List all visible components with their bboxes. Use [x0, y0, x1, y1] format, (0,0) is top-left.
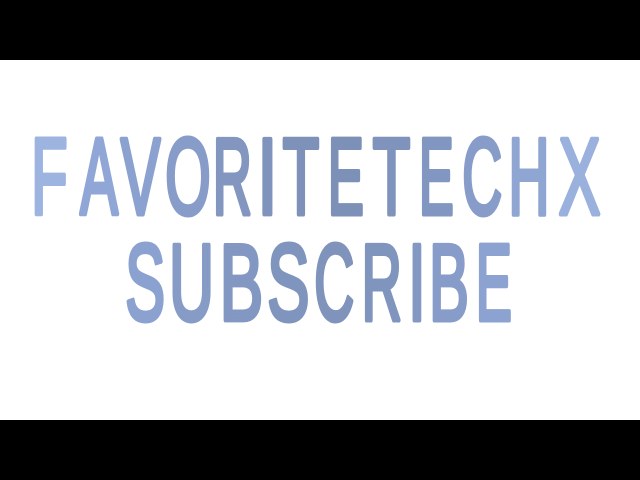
- heading: SUBSCRIBE: I: [408, 221, 426, 343]
- heading: SUBSCRIBE: [125, 221, 512, 344]
- heading: FAVORITETECHX: A: [80, 116, 118, 238]
- heading: SUBSCRIBE: B: [429, 222, 469, 344]
- heading: SUBSCRIBE: C: [314, 223, 354, 344]
- bottom black letterbox bar: [0, 420, 640, 480]
- heading: FAVORITETECHX: F: [31, 115, 68, 238]
- heading: FAVORITETECHX: T: [373, 116, 410, 237]
- heading: SUBSCRIBE: R: [362, 223, 402, 344]
- heading: FAVORITETECHX: C: [462, 117, 502, 238]
- heading: FAVORITETECHX: X: [559, 116, 600, 237]
- heading: FAVORITETECHX: O: [165, 116, 211, 238]
- top black letterbox bar: [0, 0, 640, 60]
- heading: SUBSCRIBE: U: [169, 222, 214, 343]
- heading: FAVORITETECHX: E: [419, 117, 454, 238]
- white video frame background: [0, 60, 640, 420]
- heading: FAVORITETECHX: V: [121, 116, 161, 238]
- heading: SUBSCRIBE: S: [125, 221, 165, 344]
- heading: SUBSCRIBE: B: [220, 223, 263, 344]
- heading: FAVORITETECHX: I: [257, 116, 278, 237]
- heading: FAVORITETECHX: H: [508, 116, 550, 238]
- heading: FAVORITETECHX: E: [328, 116, 364, 238]
- heading: FAVORITETECHX: T: [283, 115, 319, 238]
- heading: SUBSCRIBE: E: [476, 222, 512, 344]
- heading: FAVORITETECHX: R: [213, 116, 252, 238]
- heading: SUBSCRIBE: S: [267, 221, 309, 343]
- heading: FAVORITETECHX: [31, 115, 600, 238]
